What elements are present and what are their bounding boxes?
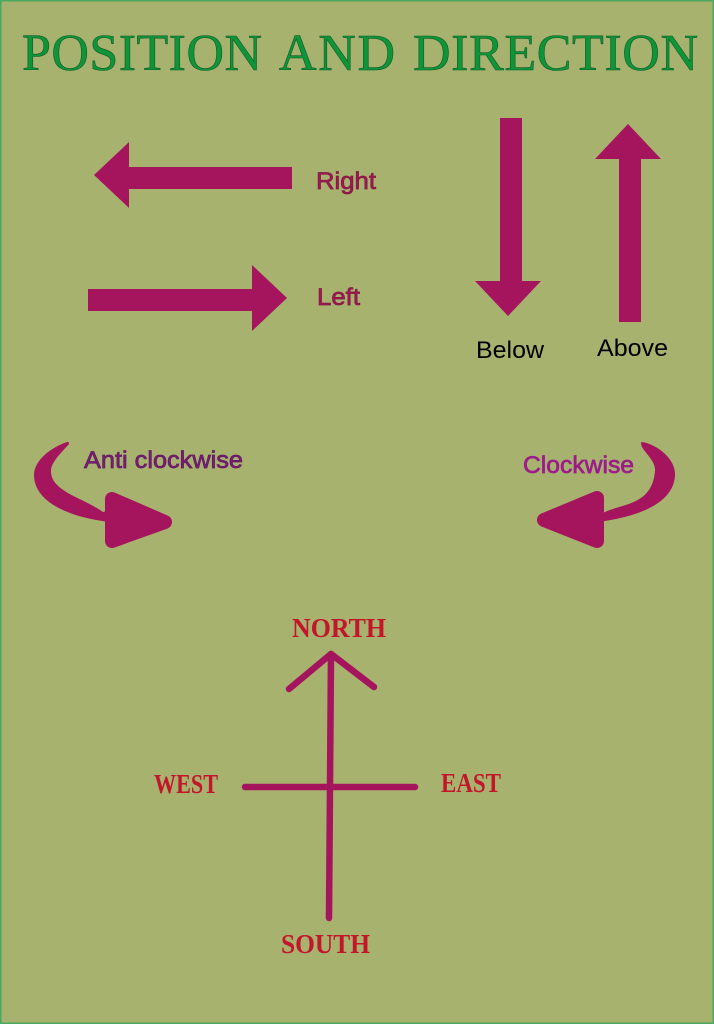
icon: clockwise curved arrow: [544, 442, 675, 541]
label: anti clockwise: Anti clockwise: [84, 447, 243, 474]
label: clockwise: Clockwise: [523, 452, 634, 479]
title: AND: [279, 25, 395, 82]
title: POSITION: [22, 25, 262, 82]
arrow: right label pointing left: [94, 142, 292, 208]
arrow: above: [595, 124, 661, 322]
arrow: left label pointing right: [88, 265, 287, 331]
compass diagram: [245, 654, 415, 918]
title: DIRECTION: [413, 25, 698, 82]
label: right: Right: [316, 168, 376, 195]
icon: anti clockwise curved arrow: [34, 442, 165, 541]
label: east: EAST: [441, 768, 501, 798]
label: west: WEST: [154, 769, 218, 799]
label: south: SOUTH: [281, 929, 370, 959]
arrow: below: [475, 118, 541, 316]
label: below: Below: [476, 337, 545, 364]
label: above: Above: [597, 335, 668, 362]
title: [22, 25, 698, 82]
label: left: Left: [317, 284, 360, 311]
label: north: NORTH: [292, 613, 386, 643]
